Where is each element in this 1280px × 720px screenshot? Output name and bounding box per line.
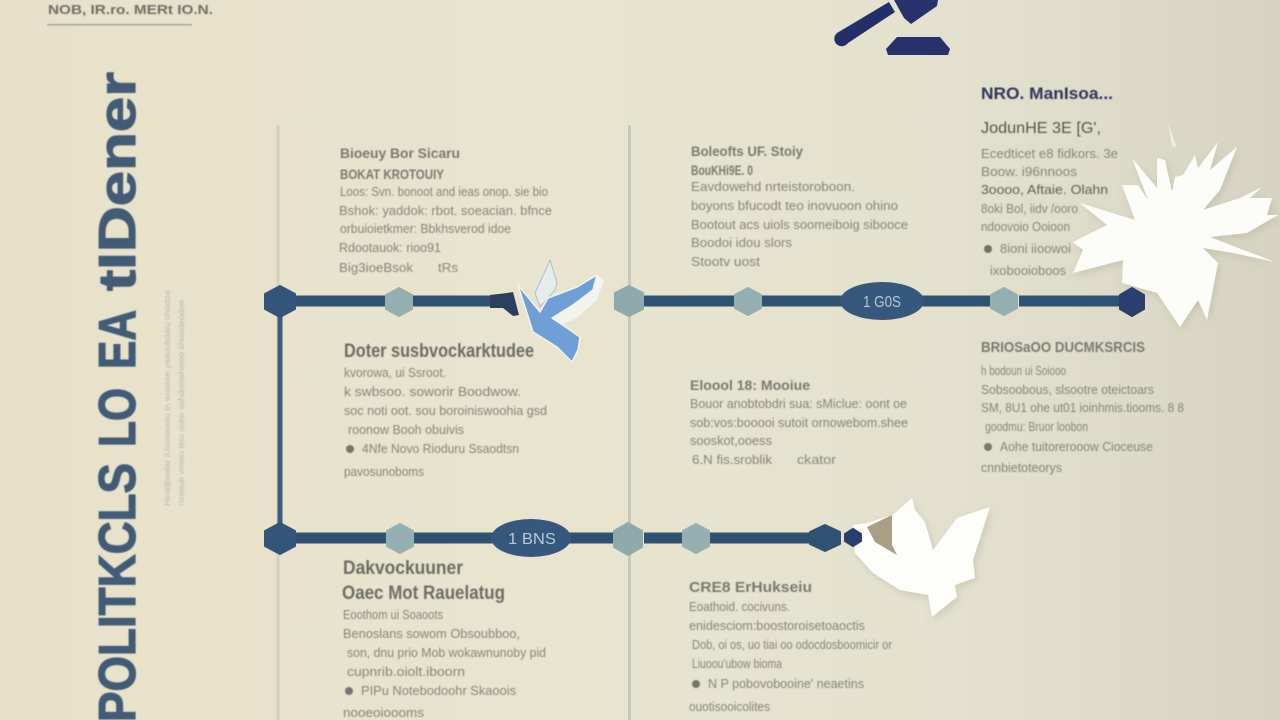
panel: text block middle 1: Doter susbvockarktudee xyxy=(344,341,534,362)
panel: text block middle 3: SM, 8U1 ohe ut01 ioinhmis.tiooms. 8 8 xyxy=(981,400,1184,415)
panel: text block top 2: Boleofts UF. Stoiy xyxy=(691,143,803,159)
panel: text block middle 2: sooskot,ooess xyxy=(690,433,772,448)
panel: text block middle 2: 6.N fis.sroblik xyxy=(692,452,773,467)
panel: text block bottom 1: cupnrib.oiolt.iboorn xyxy=(347,664,465,679)
panel: text block top 3: 8oki Bol, iidv /ooro xyxy=(981,201,1078,216)
vertical title xyxy=(89,72,147,720)
panel: text block top 2: Boodoi idou slors xyxy=(691,235,792,250)
panel: text block middle 3: cnnbietoteorys xyxy=(981,460,1062,475)
top left label: NOB, IR.ro. MERt IO.N. xyxy=(48,2,213,17)
panel: text block middle 3: goodmu: Bruor loobon xyxy=(985,419,1088,434)
panel: text block middle 1: 4Nfe Novo Rioduru Ssaodtsn xyxy=(362,441,519,456)
panel: text block middle 3: BRIOSaOO DUCMKSRCIS xyxy=(981,339,1145,356)
panel: text block middle 2: Bouor anobtobdri sua: sMiclue: oont oe xyxy=(690,396,907,411)
panel: text block top 3: NRO. ManIsoa... xyxy=(981,84,1113,103)
panel: text block bottom 2: enidesciom:boostoroisetoaoctis xyxy=(689,618,865,633)
panel: text block top 3 xyxy=(981,84,1118,278)
panel: text block top 1: BOKAT KROTOUIY xyxy=(340,166,445,182)
panel: text block bottom 1: Dakvockuuner xyxy=(343,558,464,579)
timeline: connector and rows xyxy=(265,282,1144,557)
panel: text block top 1: tRs xyxy=(438,260,459,275)
panel: text block top 1: Bioeuy Bor Sicaru xyxy=(340,145,460,161)
panel: text block top 1: Big3ioeBsok xyxy=(339,260,413,275)
panel: text block middle 1 xyxy=(344,341,547,479)
panel: text block top 1: Rdootauok: rioo91 xyxy=(339,240,441,255)
panel: text block top 3: Ecedticet e8 fidkors. 3e xyxy=(981,146,1118,161)
panel: text block top 3: Boow. i96nnoos xyxy=(981,164,1078,179)
panel: text block bottom 2: Dob, oi os, uo tiai oo odocdosboomicir or xyxy=(692,637,893,652)
panel: text block top 2: boyons bfucodt teo inovuoon ohino xyxy=(691,198,898,213)
vertical title: POLITKCLS xyxy=(89,463,147,720)
panel: text block bottom 1: Oaec Mot Rauelatug xyxy=(342,583,505,604)
panel: text block middle 1: roonow Booh obuivis xyxy=(348,422,464,437)
panel: text block top 3: JodunHE 3E [G', xyxy=(981,120,1101,137)
icon: white dove xyxy=(853,498,990,617)
panel: text block top 2: Eavdowehd nrteistoroboon. xyxy=(691,179,855,194)
vertical subtitle xyxy=(163,289,186,506)
panel: text block bottom 2: CRE8 ErHukseiu xyxy=(689,579,812,596)
panel: text block bottom 2: Eoathoid. cocivuns. xyxy=(689,599,790,614)
panel: text block bottom 1: son, dnu prio Mob wokawnunoby pid xyxy=(347,645,546,660)
row 2 nodes xyxy=(265,523,861,555)
panel: text block bottom 1: Benoslans sowom Obsoubboo, xyxy=(343,626,520,641)
panel: text block top 2: BouKHi9E. 0 xyxy=(691,162,753,178)
panel: text block top 3: ixobooioboos xyxy=(990,263,1066,278)
panel: text block middle 1: k swbsoo. soworir Boodwow. xyxy=(344,384,521,399)
panel: text block bottom 1: nooeoioooms xyxy=(343,705,425,720)
panel: text block bottom 1: PIPu Notebodoohr Skaoois xyxy=(361,683,516,698)
panel: text block bottom 1: Eoothom ui Soaoots xyxy=(343,607,443,622)
panel: text block middle 2: ckator xyxy=(797,452,837,467)
icon: white burst xyxy=(1073,123,1278,327)
panel: text block top 1: orbuioietkmer: Bbkhsverod idoe xyxy=(340,221,511,236)
panel: text block bottom 1 xyxy=(342,558,546,720)
row 1 year badge xyxy=(840,282,924,320)
panel: text block top 3: 3oooo, Aftaie. Olahn xyxy=(981,182,1108,197)
panel: text block middle 2 xyxy=(690,377,908,467)
panel: text block top 3: 8ioni iioowoi xyxy=(1000,241,1071,256)
panel: text block top 1: Bshok: yaddok: rbot. soeacian. bfnce xyxy=(339,203,552,218)
vertical connector xyxy=(278,301,282,538)
panel: text block top 1: Loos: Svn. bonoot and ieas onop. sie bio xyxy=(340,184,548,199)
vertical subtitle: Hirddjoodar iUovowatiu in wuatwe yaitoubdaiu ohbdoo xyxy=(163,289,172,506)
panel: text block middle 1: kvorowa, ui Ssroot. xyxy=(344,365,446,380)
panel: text block top 1 xyxy=(339,145,552,275)
panel: text block bottom 2: Liuoou'ubow bioma xyxy=(692,656,783,671)
vertical title: LO xyxy=(89,388,147,447)
panel: text block top 2: Stootv uost xyxy=(691,254,760,269)
panel: text block top 3: ndoovoio Ooioon xyxy=(981,219,1070,234)
panel: text block bottom 2: N P pobovobooine' neaetins xyxy=(708,676,864,691)
panel: text block middle 2: sob:vos:booooi sutoit ornowebom.shee xyxy=(690,415,908,430)
panel: text block middle 3: h bodoun ui Soiooo xyxy=(981,363,1066,378)
icon: blue dove xyxy=(490,260,604,362)
row 1 year badge: 1 G0S xyxy=(863,294,901,311)
panel: text block middle 1: pavosunoboms xyxy=(344,464,424,479)
icon: gavel xyxy=(834,0,950,55)
panel: text block middle 2: Eloool 18: Mooiue xyxy=(690,377,810,393)
vertical title: tIDener xyxy=(89,72,147,291)
vertical title: EA xyxy=(89,310,147,369)
row 2 line xyxy=(280,532,816,544)
panel: text block top 2: Bootout acs uiols soomeiboig sibooce xyxy=(691,217,908,232)
row 1 line xyxy=(280,296,1124,306)
panel: text block middle 1: soc noti oot. sou boroiniswoohia gsd xyxy=(344,403,547,418)
panel: text block bottom 2: ouotisooicolites xyxy=(689,699,770,714)
panel: text block middle 3: Sobsoobous, slsootre oteictoars xyxy=(981,382,1154,397)
column rules xyxy=(276,125,631,720)
panel: text block top 2 xyxy=(691,143,908,269)
panel: text block middle 3 xyxy=(981,339,1184,475)
panel: text block middle 3: Aohe tuitorerooow Cioceuse xyxy=(1000,439,1153,454)
row 2 year badge: 1 BNS xyxy=(508,531,556,548)
row 2 year badge xyxy=(491,519,571,557)
row 1 nodes xyxy=(265,286,1144,317)
vertical subtitle: rissoue vinoiu teiu ootw sohdoowhaioo shoodeodoe xyxy=(177,299,186,506)
panel: text block bottom 2 xyxy=(689,579,893,714)
